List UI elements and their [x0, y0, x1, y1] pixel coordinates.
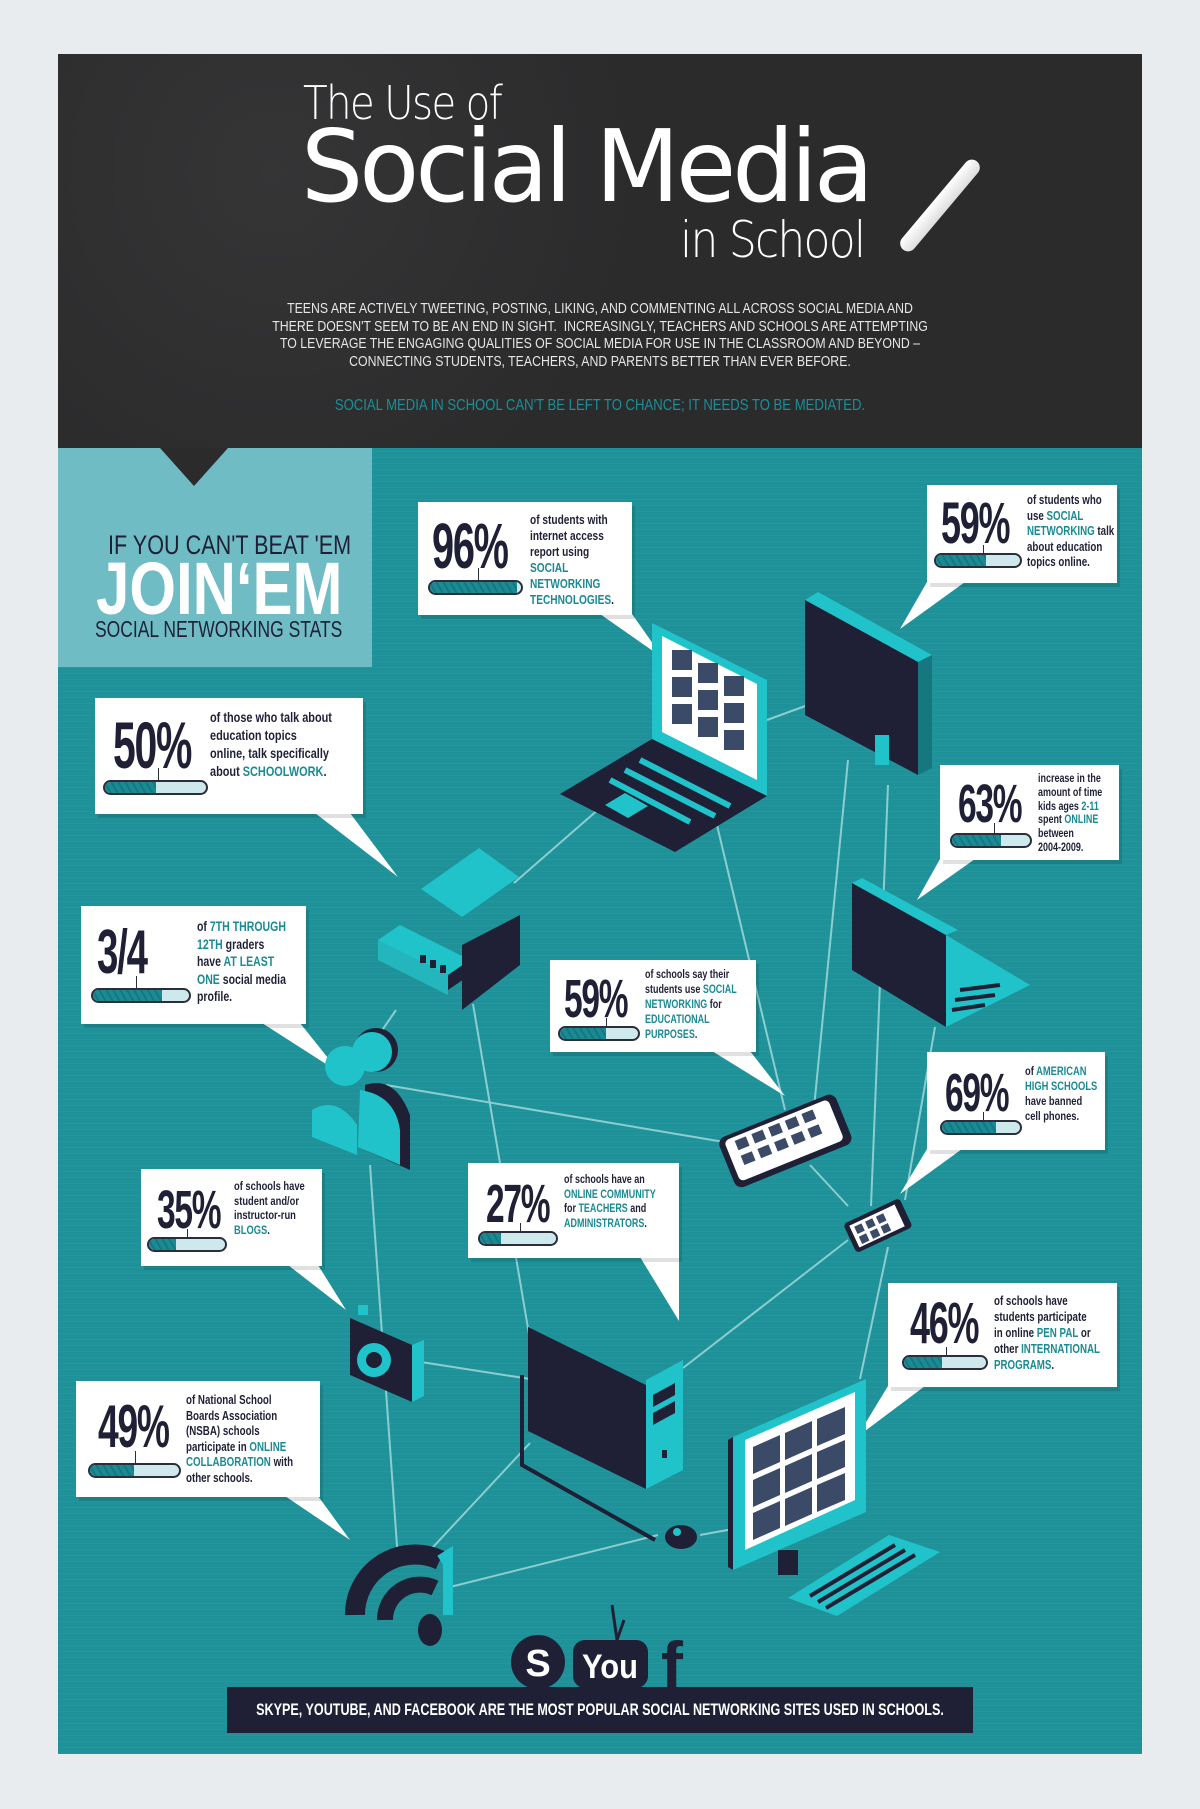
callout: 46%: 46% — [910, 1291, 978, 1356]
title: in School: in School — [680, 211, 864, 269]
callout: 69%: HIGH SCHOOLS — [1025, 1079, 1097, 1093]
callout: 59% schools: of schools say their — [645, 969, 729, 981]
icon: social logos: f — [661, 1628, 684, 1702]
callout: 96% — [418, 502, 632, 615]
callout: 3/4: profile. — [197, 989, 232, 1004]
icon: people — [312, 1028, 410, 1170]
callout: 69%: of AMERICAN — [1025, 1064, 1087, 1078]
callout: 96%: SOCIAL — [530, 560, 568, 575]
icon: camera — [350, 1305, 424, 1402]
callout: 3/4: 12TH graders — [197, 936, 264, 952]
callout: 59% schools: NETWORKING for — [645, 999, 722, 1011]
footer banner — [227, 1687, 973, 1733]
callout: 59% students: topics online. — [1027, 555, 1090, 569]
callout: 59% schools: 59% — [564, 969, 627, 1029]
callout: 63%: 63% — [958, 774, 1021, 834]
tagline: SOCIAL MEDIA IN SCHOOL CAN'T BE LEFT TO CHANCE; IT NEEDS TO BE MEDIATED. — [335, 397, 865, 414]
footer text: SKYPE, YOUTUBE, AND FACEBOOK ARE THE MOST POPULAR SOCIAL NETWORKING SITES USED IN SCHOOLS. — [256, 1700, 944, 1719]
callout: 35%: of schools have — [234, 1179, 305, 1193]
icon: tablet — [717, 1092, 854, 1190]
callout: 63% — [940, 765, 1119, 860]
callout: 69%: cell phones. — [1025, 1109, 1079, 1123]
callout: 46%: in online PEN PAL or — [994, 1326, 1091, 1340]
callout: 27%: for TEACHERS and — [564, 1203, 646, 1215]
intro text: CONNECTING STUDENTS, TEACHERS, AND PARENTS BETTER THAN EVER BEFORE. — [349, 352, 851, 370]
intro text — [272, 300, 928, 370]
callout: 49%: Boards Association — [186, 1408, 277, 1422]
callout: 96%: of students with — [530, 512, 608, 527]
header panel — [58, 54, 1142, 448]
callout: 49% — [76, 1381, 320, 1497]
callout: 69%: 69% — [945, 1063, 1008, 1123]
callout: 27%: of schools have an — [564, 1174, 645, 1186]
callout: 50%: online, talk specifically — [210, 745, 329, 761]
callout tails — [262, 582, 975, 1540]
callout: 49%: of National School — [186, 1393, 272, 1407]
title: Social Media: Social Media — [301, 108, 870, 225]
callout: 59% students — [927, 485, 1117, 583]
heading: join em: JOIN‘EM — [96, 547, 342, 630]
callout: 27%: 27% — [486, 1174, 549, 1234]
callout: 96%: report using — [530, 544, 589, 559]
callout: 96%: internet access — [530, 528, 604, 543]
callout: 49%: other schools. — [186, 1470, 253, 1484]
intro text: THERE DOESN'T SEEM TO BE AN END IN SIGHT. INCREASINGLY, TEACHERS AND SCHOOLS ARE ATTEMPTING — [272, 318, 928, 334]
callout: 27% — [468, 1163, 679, 1258]
callout: 46%: PROGRAMS. — [994, 1358, 1054, 1372]
subheading: SOCIAL NETWORKING STATS — [95, 616, 342, 642]
callout: 63%: between — [1038, 828, 1074, 840]
callout: 63%: amount of time — [1038, 787, 1102, 799]
icon: keyboard — [788, 1535, 940, 1616]
callout: 59% schools: students use SOCIAL — [645, 984, 737, 996]
callout: 49%: COLLABORATION with — [186, 1455, 293, 1469]
icon: wifi — [355, 1555, 448, 1646]
callout: 46%: students participate — [994, 1310, 1087, 1324]
callout: 35%: instructor-run — [234, 1208, 296, 1222]
callout: 69% — [927, 1052, 1105, 1150]
callout: 50%: about SCHOOLWORK. — [210, 763, 326, 779]
callout: 49%: participate in ONLINE — [186, 1440, 286, 1454]
callout: 35%: 35% — [157, 1180, 220, 1240]
callout: 69%: have banned — [1025, 1094, 1082, 1108]
callout: 59% students: 59% — [941, 491, 1009, 556]
icon: desktop computer — [522, 1327, 697, 1549]
intro text: TEENS ARE ACTIVELY TWEETING, POSTING, LIKING, AND COMMENTING ALL ACROSS SOCIAL MEDIA AND — [287, 300, 913, 317]
callout: 59% schools — [550, 960, 756, 1052]
callout: 59% students: NETWORKING talk — [1027, 524, 1114, 538]
callout: 27%: ADMINISTRATORS. — [564, 1218, 647, 1230]
callout: 49%: (NSBA) schools — [186, 1424, 260, 1438]
icon: social logos — [511, 1605, 684, 1702]
icon: printer — [378, 848, 520, 1010]
icon: laptop right — [852, 878, 1030, 1027]
callout: 35%: student and/or — [234, 1194, 299, 1208]
callout: 46%: of schools have — [994, 1294, 1068, 1308]
callout: 96%: NETWORKING — [530, 576, 600, 591]
callout: 3/4: 3/4 — [97, 918, 147, 987]
icon: monitor top right — [805, 592, 932, 775]
callout: 3/4: have AT LEAST — [197, 954, 274, 969]
title: The Use of: The Use of — [303, 76, 501, 130]
icon: social logos: You — [582, 1648, 638, 1686]
intro text: TO LEVERAGE THE ENGAGING QUALITIES OF SOCIAL MEDIA FOR USE IN THE CLASSROOM AND BEYOND – — [280, 335, 920, 352]
icon: phone — [843, 1198, 913, 1253]
callout: 63%: spent ONLINE — [1038, 814, 1098, 826]
callout: 46% — [888, 1283, 1117, 1387]
callout: 35% — [141, 1169, 322, 1266]
callout: 59% schools: EDUCATIONAL — [645, 1014, 710, 1026]
callout: 63%: kids ages 2-11 — [1038, 801, 1099, 813]
callout: 59% students: use SOCIAL — [1027, 508, 1083, 522]
pointer triangle — [160, 448, 228, 486]
panel: join em — [58, 448, 372, 667]
callout: 27%: ONLINE COMMUNITY — [564, 1188, 656, 1200]
callout: 46%: other INTERNATIONAL — [994, 1342, 1100, 1356]
callout: 3/4: ONE social media — [197, 972, 286, 986]
callout: 49%: 49% — [98, 1393, 169, 1460]
callout: 59% students: of students who — [1027, 493, 1102, 507]
callout: 96%: 96% — [432, 510, 508, 582]
callout: 59% students: about education — [1027, 540, 1102, 554]
icon: monitor with apps — [728, 1379, 866, 1575]
heading: if you can't beat em: IF YOU CAN'T BEAT 'EM — [108, 530, 351, 560]
callout: 50%: of those who talk about — [210, 709, 332, 725]
main teal panel — [58, 448, 1142, 1754]
callout: 3/4 — [81, 906, 306, 1024]
icon: social logos: S — [525, 1643, 551, 1685]
callout: 96%: TECHNOLOGIES. — [530, 592, 614, 607]
icon: laptop — [560, 623, 767, 852]
callout: 35%: BLOGS. — [234, 1222, 270, 1236]
callout: 63%: 2004-2009. — [1038, 842, 1083, 854]
icon: chalk — [897, 156, 983, 255]
callout: 3/4: of 7TH THROUGH — [197, 919, 286, 934]
callout: 63%: increase in the — [1038, 773, 1101, 785]
callout: 50%: 50% — [113, 708, 191, 782]
callout: 59% schools: PURPOSES. — [645, 1029, 697, 1041]
callout: 50% — [95, 698, 363, 814]
callout: 50%: education topics — [210, 727, 297, 743]
